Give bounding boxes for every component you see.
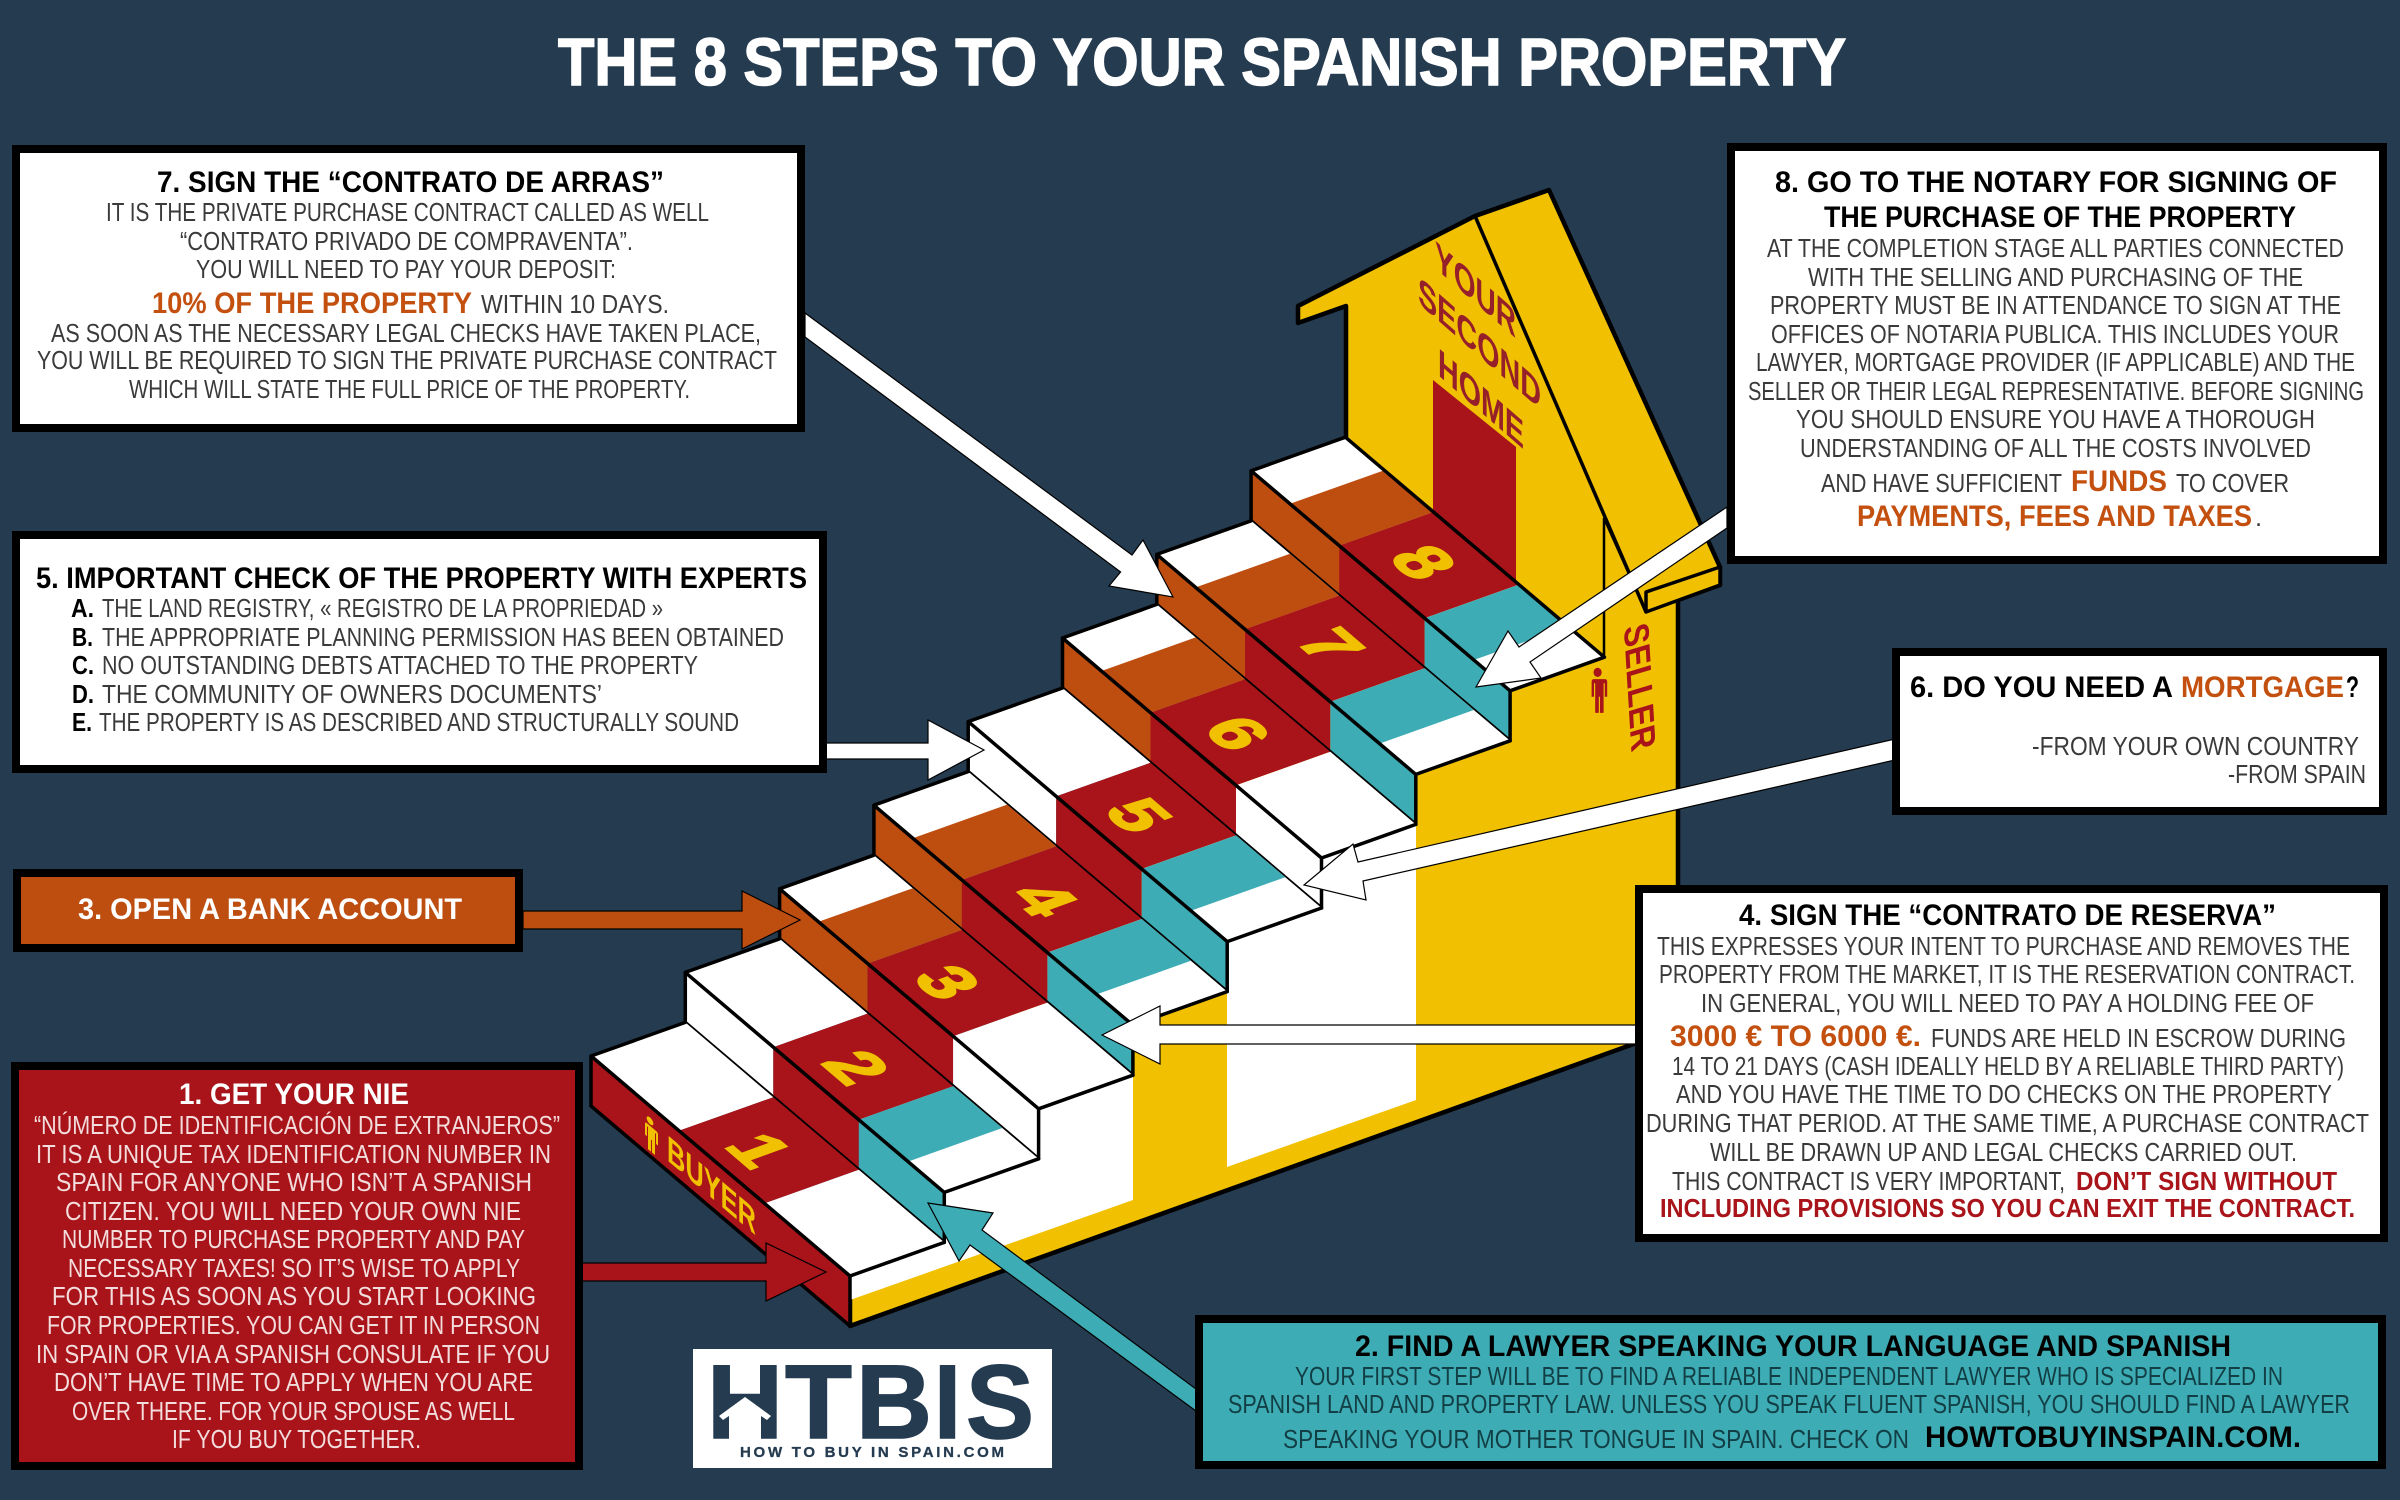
arrow: step 3 bbox=[523, 891, 800, 949]
body text: INCLUDING PROVISIONS SO YOU CAN EXIT THE CONTRACT. bbox=[1660, 1195, 2355, 1223]
logo letters: I bbox=[934, 1344, 961, 1461]
heading: 8. GO TO THE NOTARY FOR SIGNING OF bbox=[1775, 166, 2337, 199]
body text: WILL BE DRAWN UP AND LEGAL CHECKS CARRIED OUT. bbox=[1710, 1139, 2297, 1167]
body text: WITHIN 10 DAYS. bbox=[481, 291, 669, 319]
body text: HOWTOBUYINSPAIN.COM. bbox=[1925, 1421, 2301, 1454]
panel: step 4 bbox=[1639, 889, 2384, 1238]
heading: MORTGAGE bbox=[2181, 671, 2344, 704]
white wall under lower stairs bbox=[850, 1076, 1133, 1300]
body text: YOU SHOULD ENSURE YOU HAVE A THOROUGH bbox=[1796, 406, 2315, 434]
heading: 4. SIGN THE “CONTRATO DE RESERVA” bbox=[1739, 899, 2276, 932]
body text: IF YOU BUY TOGETHER. bbox=[172, 1426, 421, 1454]
title: THE 8 STEPS TO YOUR SPANISH PROPERTY bbox=[558, 25, 1846, 100]
house label: HOME bbox=[1438, 338, 1524, 458]
logo letters: T bbox=[785, 1344, 852, 1461]
panel: step 1 bbox=[15, 1066, 579, 1466]
icon: seller person bbox=[1590, 668, 1607, 713]
door bbox=[1433, 380, 1516, 583]
arrow: step 2 bbox=[928, 1203, 1200, 1414]
house label bbox=[1418, 231, 1541, 458]
step numbers bbox=[709, 537, 1473, 1176]
body text: AND HAVE SUFFICIENT bbox=[1821, 470, 2062, 498]
step 5 bbox=[968, 688, 1322, 992]
body text: THIS CONTRACT IS VERY IMPORTANT, bbox=[1672, 1168, 2065, 1196]
checklist: THE COMMUNITY OF OWNERS DOCUMENTS’ bbox=[102, 681, 602, 709]
house label: YOUR bbox=[1435, 231, 1516, 347]
step numbers: 5 bbox=[1088, 790, 1188, 841]
body text: 10% OF THE PROPERTY bbox=[152, 287, 472, 320]
step 3 bbox=[780, 855, 1133, 1159]
body text: 3000 € TO 6000 €. bbox=[1670, 1020, 1921, 1053]
body text: TO COVER bbox=[2176, 470, 2289, 498]
step 2 bbox=[685, 939, 1039, 1242]
panel: step 2 bbox=[1199, 1319, 2382, 1465]
body text: FOR THIS AS SOON AS YOU START LOOKING bbox=[52, 1283, 536, 1311]
arrow: step 1 bbox=[580, 1243, 826, 1301]
seller label: SELLER bbox=[1616, 619, 1663, 755]
body text bbox=[2032, 733, 2366, 789]
body text: CITIZEN. YOU WILL NEED YOUR OWN NIE bbox=[65, 1198, 521, 1226]
panel: step 6 bbox=[1896, 652, 2383, 811]
checklist: THE APPROPRIATE PLANNING PERMISSION HAS BEEN OBTAINED bbox=[102, 624, 784, 652]
body text bbox=[37, 199, 777, 404]
logo tagline: HOW TO BUY IN SPAIN.COM bbox=[740, 1444, 1004, 1461]
body text: WITH THE SELLING AND PURCHASING OF THE bbox=[1808, 264, 2303, 292]
body text: NUMBER TO PURCHASE PROPERTY AND PAY bbox=[62, 1226, 525, 1254]
step numbers: 2 bbox=[806, 1042, 906, 1093]
body text: “NÚMERO DE IDENTIFICACIÓN DE EXTRANJEROS” bbox=[34, 1111, 560, 1140]
arrow: step 4 bbox=[1102, 1006, 1640, 1064]
heading: ? bbox=[2346, 671, 2359, 704]
body text: SPEAKING YOUR MOTHER TONGUE IN SPAIN. CHECK ON bbox=[1283, 1426, 1909, 1454]
buyer label: BUYER bbox=[667, 1127, 756, 1244]
arrow: step 5 bbox=[826, 720, 984, 780]
checklist: E. bbox=[72, 709, 92, 737]
body text bbox=[1228, 1363, 2350, 1454]
icon: buyer person bbox=[644, 1112, 658, 1158]
step numbers: 8 bbox=[1373, 537, 1473, 588]
body text: IN SPAIN OR VIA A SPANISH CONSULATE IF YOU bbox=[36, 1341, 550, 1369]
step numbers: 4 bbox=[994, 874, 1094, 925]
step 4 bbox=[874, 772, 1227, 1075]
step 8 bbox=[1251, 437, 1604, 741]
illustration: house and staircase bbox=[591, 190, 1720, 1326]
body text: SPAIN FOR ANYONE WHO ISN’T A SPANISH bbox=[56, 1169, 532, 1197]
logo bbox=[693, 1344, 1052, 1468]
house label: SECOND bbox=[1418, 266, 1541, 419]
body text: FUNDS bbox=[2071, 465, 2167, 498]
body text: FOR PROPERTIES. YOU CAN GET IT IN PERSON bbox=[47, 1312, 540, 1340]
body text: UNDERSTANDING OF ALL THE COSTS INVOLVED bbox=[1800, 435, 2311, 463]
body text: PAYMENTS, FEES AND TAXES bbox=[1857, 500, 2252, 533]
step numbers: 7 bbox=[1280, 620, 1380, 671]
heading: 6. DO YOU NEED A bbox=[1910, 671, 2173, 704]
body text: YOU WILL BE REQUIRED TO SIGN THE PRIVATE PURCHASE CONTRACT bbox=[37, 347, 777, 375]
step 1 bbox=[591, 1022, 944, 1326]
logo letters: B bbox=[856, 1344, 932, 1461]
heading: THE PURCHASE OF THE PROPERTY bbox=[1824, 201, 2296, 234]
body text: WHICH WILL STATE THE FULL PRICE OF THE PROPERTY. bbox=[129, 376, 690, 404]
logo letters: S bbox=[966, 1344, 1034, 1461]
body text: AS SOON AS THE NECESSARY LEGAL CHECKS HAVE TAKEN PLACE, bbox=[51, 320, 761, 348]
body text: IT IS A UNIQUE TAX IDENTIFICATION NUMBER IN bbox=[36, 1141, 551, 1169]
body text: -FROM YOUR OWN COUNTRY bbox=[2032, 733, 2359, 761]
body text bbox=[1748, 235, 2364, 533]
checklist: C. bbox=[72, 652, 94, 680]
heading: 3. OPEN A BANK ACCOUNT bbox=[78, 893, 462, 926]
body text bbox=[34, 1111, 560, 1454]
checklist: A. bbox=[71, 595, 94, 623]
panel: step 3 bbox=[17, 873, 519, 948]
white wall under upper stairs bbox=[1227, 775, 1416, 1167]
arrow: step 8 bbox=[1476, 507, 1727, 687]
heading bbox=[1910, 671, 2359, 704]
checklist: THE LAND REGISTRY, « REGISTRO DE LA PROPRIEDAD » bbox=[102, 595, 663, 623]
body text: IN GENERAL, YOU WILL NEED TO PAY A HOLDING FEE OF bbox=[1701, 990, 2314, 1018]
checklist: B. bbox=[72, 624, 93, 652]
house ridge lines bbox=[1475, 216, 1720, 657]
panel: step 7 bbox=[16, 149, 801, 428]
body text bbox=[1646, 933, 2369, 1223]
heading: 7. SIGN THE “CONTRATO DE ARRAS” bbox=[157, 166, 664, 199]
body text: DON’T SIGN WITHOUT bbox=[2076, 1168, 2337, 1196]
body text: -FROM SPAIN bbox=[2228, 761, 2366, 789]
panel: step 5 bbox=[16, 535, 823, 769]
panel: step 8 bbox=[1731, 147, 2383, 560]
heading: 2. FIND A LAWYER SPEAKING YOUR LANGUAGE AND SPANISH bbox=[1355, 1330, 2231, 1363]
step numbers: 3 bbox=[897, 957, 997, 1008]
logo letters bbox=[707, 1344, 1034, 1461]
arrow: step 7 bbox=[805, 313, 1173, 597]
body text: DON’T HAVE TIME TO APPLY WHEN YOU ARE bbox=[54, 1369, 533, 1397]
checklist: THE PROPERTY IS AS DESCRIBED AND STRUCTURALLY SOUND bbox=[99, 709, 739, 737]
icon: house in logo bbox=[719, 1397, 771, 1441]
step numbers: 6 bbox=[1187, 708, 1287, 759]
step 7 bbox=[1157, 521, 1510, 824]
body text: OVER THERE. FOR YOUR SPOUSE AS WELL bbox=[72, 1398, 515, 1426]
body text: “CONTRATO PRIVADO DE COMPRAVENTA”. bbox=[180, 228, 633, 256]
body text: NECESSARY TAXES! SO IT’S WISE TO APPLY bbox=[68, 1255, 520, 1283]
logo letters: H bbox=[707, 1344, 783, 1461]
checklist: NO OUTSTANDING DEBTS ATTACHED TO THE PROPERTY bbox=[102, 652, 698, 680]
step 6 bbox=[1062, 604, 1416, 908]
checklist bbox=[71, 595, 784, 737]
step numbers: 1 bbox=[709, 1125, 809, 1176]
house body bbox=[850, 190, 1720, 1326]
body text: IT IS THE PRIVATE PURCHASE CONTRACT CALLED AS WELL bbox=[106, 199, 709, 227]
body text: YOU WILL NEED TO PAY YOUR DEPOSIT: bbox=[196, 256, 616, 284]
arrow: step 6 bbox=[1304, 739, 1895, 900]
body text: . bbox=[2255, 504, 2262, 532]
checklist: D. bbox=[72, 681, 94, 709]
heading: 5. IMPORTANT CHECK OF THE PROPERTY WITH EXPERTS bbox=[36, 562, 807, 595]
heading: 1. GET YOUR NIE bbox=[179, 1078, 409, 1111]
heading bbox=[1775, 166, 2337, 234]
body text: FUNDS ARE HELD IN ESCROW DURING bbox=[1931, 1025, 2346, 1053]
